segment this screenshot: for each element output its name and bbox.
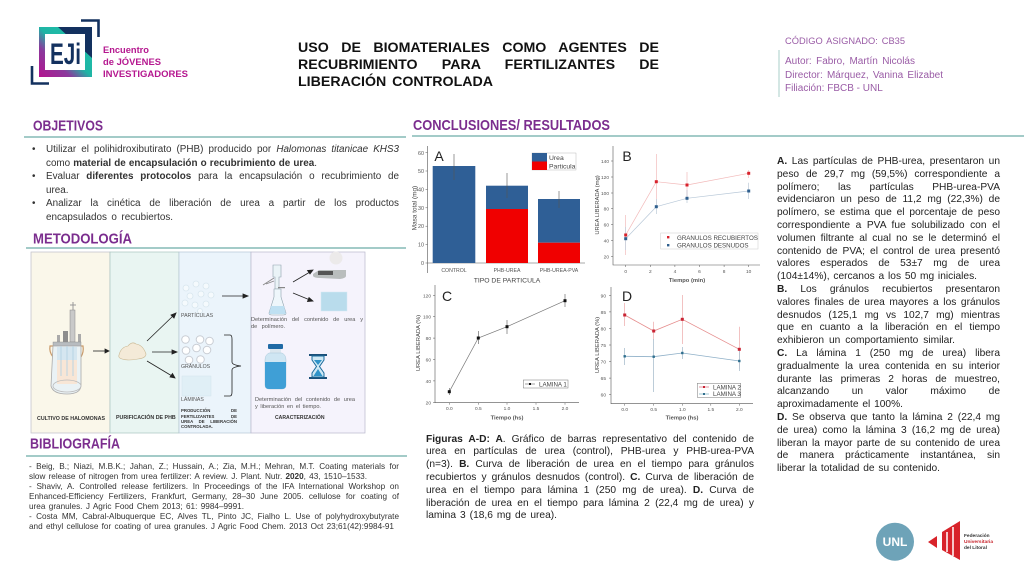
icon: PHB powder <box>119 343 146 360</box>
text block: objetivos: • <box>32 198 35 209</box>
chart B: urea liberada gránulos: 100 <box>601 191 609 197</box>
text block: diagram labels: Determinación del contenido de urea <box>255 397 355 403</box>
chart A: bar chart masa total: Masa total (mg) <box>412 186 418 230</box>
chart B: urea liberada gránulos <box>595 146 760 284</box>
chart D: urea liberada láminas 2 y 3: 80 <box>601 326 606 332</box>
chart A: bar chart masa total: 40 <box>418 188 424 194</box>
text block: objetivos: • <box>32 144 35 155</box>
text block: results discussion: desnudos (125,1 mg vs 102,7 mg) mientras <box>777 310 1000 321</box>
text block: objetivos: como material de encapsulación o recubrimiento de urea. <box>46 158 317 169</box>
chart D: urea liberada láminas 2 y 3 <box>595 287 753 422</box>
chart B: urea liberada gránulos: 0 <box>624 269 627 275</box>
icon: bioreactor <box>50 302 83 394</box>
text block: objetivos: Utilizar el polihidroxibutirato (PHB) producido por Halomonas titanicae KHS3 <box>46 144 399 155</box>
chart C: urea liberada lámina 1: 0.0 <box>446 406 453 412</box>
text block: objetivos: Analizar la cinética de liberación de urea a partir de los productos <box>46 198 399 209</box>
text block: results discussion: valores esperados de 53±7 mg de urea <box>777 258 1000 269</box>
text block: author info: Autor: Fabro, Martín Nicolás <box>785 56 915 67</box>
title: RECUBRIMIENTO PARA FERTILIZANTES DE <box>298 57 659 73</box>
text block: diagram labels: CARACTERIZACIÓN <box>275 415 325 421</box>
chart A: bar chart masa total: Particula <box>549 164 576 170</box>
chart B: urea liberada gránulos: GRANULOS DESNUDOS <box>677 242 749 250</box>
chart B: urea liberada gránulos: Tiempo (min) <box>669 278 705 284</box>
chart D: urea liberada láminas 2 y 3: 75 <box>601 343 606 349</box>
chart B: urea liberada gránulos: 140 <box>601 159 609 165</box>
chart B: urea liberada gránulos: B <box>622 148 632 164</box>
text block: figure caption: Figuras A-D: A. Gráfico de barras representativo del contenido de <box>426 434 754 444</box>
logo: Encuentro de Jóvenes Investigadores: de JÓVENES <box>103 56 161 67</box>
text block: results discussion: correspondiente a PVA fue solubilizado con el <box>777 220 1000 231</box>
text block: results discussion <box>777 156 1000 474</box>
text block: results discussion: alcanzando un valor máximo de <box>777 386 1000 397</box>
text block: results discussion: polímero; las partículas PHB-urea-PVA <box>777 182 1000 193</box>
chart D: urea liberada láminas 2 y 3: 90 <box>601 293 606 299</box>
text block: results discussion: gradualmente la urea contenida en su interior <box>777 361 1000 372</box>
text block: results discussion: valores finales de urea mayores a los gránulos <box>777 297 1000 308</box>
chart A: bar chart masa total: 30 <box>418 206 424 212</box>
icon: balance <box>313 252 346 279</box>
chart D: urea liberada láminas 2 y 3: LAMINA 2 <box>713 384 741 392</box>
text block: diagram labels: PARTÍCULAS <box>181 313 213 319</box>
chart A: bar chart masa total: TIPO DE PARTICULA <box>474 278 541 284</box>
logo: UNL <box>876 523 914 561</box>
panel: producción <box>179 252 251 433</box>
chart A: bar chart masa total: 50 <box>418 169 424 175</box>
arrows: process flow <box>93 270 313 378</box>
chart B: urea liberada gránulos: 120 <box>601 175 609 181</box>
text block: results discussion: polímero, se estima que el porcentaje de peso <box>777 207 1000 218</box>
chart D: urea liberada láminas 2 y 3: 85 <box>601 310 606 316</box>
chart B: urea liberada gránulos: 80 <box>604 206 609 212</box>
logo: Federación Universitaria del Litoral <box>928 521 993 560</box>
text block: author info: CÓDIGO ASIGNADO: CB35 <box>785 36 905 46</box>
text block: diagram labels: CULTIVO DE HALOMONAS <box>37 416 105 422</box>
chart A: bar chart masa total: A <box>434 148 444 164</box>
text block: diagram labels: CONTROLADA. <box>181 424 213 429</box>
heading: objetivos: OBJETIVOS <box>33 118 103 134</box>
text block: results discussion: exhibieron un comportamiento similar. <box>777 335 955 346</box>
chart D: urea liberada láminas 2 y 3: 1.5 <box>707 407 714 413</box>
logo: Federación Universitaria del Litoral: Federación <box>964 533 990 539</box>
chart B: urea liberada gránulos: 10 <box>746 269 752 275</box>
text block: diagram labels: LÁMINAS <box>181 397 204 403</box>
chart A: bar chart masa total: 20 <box>418 224 424 230</box>
text block: results discussion: (104±14%), cercanos a los 50 mg iniciales. <box>777 271 977 282</box>
chart D: urea liberada láminas 2 y 3: 2.0 <box>736 407 743 413</box>
chart C: urea liberada lámina 1: 80 <box>426 336 431 342</box>
panel: cultivo <box>31 252 110 433</box>
chart C: urea liberada lámina 1: 60 <box>426 358 431 364</box>
text block: diagram labels: UREA DE LIBERACIÓN <box>181 419 237 424</box>
text block: results discussion: volumen filtrante al cual no se le determinó el <box>777 233 1000 244</box>
text block: author info <box>785 36 943 94</box>
logo: Encuentro de Jóvenes Investigadores: EJi <box>50 38 81 71</box>
chart B: urea liberada gránulos: UREA LIBERADA (mg) <box>595 175 601 235</box>
text block: bibliografía: Enhanced-Efficiency Fertilizers, Frankfurt, Germany, 28–30 June 2005. cellulose for coating of <box>29 492 399 500</box>
chart C: urea liberada lámina 1: 2.0 <box>562 406 569 412</box>
chart A: bar chart masa total: CONTROL <box>441 268 467 274</box>
chart D: urea liberada láminas 2 y 3: UREA LIBERADA (%) <box>595 317 601 373</box>
chart C: urea liberada lámina 1: C <box>442 288 452 304</box>
chart B: urea liberada gránulos: 8 <box>723 269 726 275</box>
text block: results discussion: C. La lámina 1 (250 mg de urea) libera <box>777 348 1000 359</box>
text block: results discussion: contenido de PVA; el control de urea presentó <box>777 246 1000 257</box>
text block: diagram labels: GRÁNULOS <box>181 364 210 370</box>
chart D: urea liberada láminas 2 y 3: 0.0 <box>621 407 628 413</box>
text block: bibliografía: slow release of nitrogen from urea fertilizer: A review. J. Plant. Nutr. 2020, 43, 1510–1533. <box>29 472 367 480</box>
title: LIBERACIÓN CONTROLADA <box>298 74 493 90</box>
text block: bibliografía: - Costa MM, Cabral-Albuquerque EC, Alves TL, Pinto JC, Fialho L. Use of polyhydroxybutyrate <box>29 512 399 520</box>
text block: objetivos <box>32 144 399 223</box>
heading: metodología: METODOLOGÍA <box>33 230 132 248</box>
text block: diagram labels: PURIFICACIÓN DE PHB <box>116 415 176 421</box>
icon: brace <box>224 335 241 396</box>
chart D: urea liberada láminas 2 y 3: 0.5 <box>650 407 657 413</box>
chart B: urea liberada gránulos: 40 <box>604 238 609 244</box>
chart B: urea liberada gránulos: 4 <box>674 269 677 275</box>
divider: author block <box>778 50 780 97</box>
chart C: urea liberada lámina 1: LAMINA 1 <box>539 381 567 388</box>
logo: UNL: UNL <box>883 535 907 549</box>
text block: results discussion: durante las primeras 2 horas de muestreo, <box>777 374 1000 385</box>
chart A: bar chart masa total: 10 <box>418 242 424 248</box>
chart B: urea liberada gránulos: 20 <box>604 254 609 260</box>
heading: bibliografía: BIBLIOGRAFÍA <box>30 436 120 452</box>
text block: results discussion: A. Las partículas de PHB-urea, presentaron un <box>777 156 1000 167</box>
text block: figure caption: urea en el tiempo para lámina 1 (250 mg de urea). D. Curva de <box>426 485 754 496</box>
title: USO DE BIOMATERIALES COMO AGENTES DE <box>298 40 659 56</box>
icon: lámina <box>182 376 211 396</box>
chart B: urea liberada gránulos: 6 <box>698 269 701 275</box>
text block: bibliografía: and ethyl cellulose for coating of urea granules. J Agric Food Chem. 2013 Oct 23;61(42):9984-91 <box>29 522 394 530</box>
chart D: urea liberada láminas 2 y 3: 65 <box>601 376 606 382</box>
chart A: bar chart masa total <box>412 146 585 284</box>
text block: results discussion: liberar la totalidad de su contenido. <box>777 463 940 474</box>
text block: bibliografía <box>29 462 400 530</box>
text block: figure caption: recubiertos y gránulos desnudos (control). C. Curva de liberación de <box>426 472 754 483</box>
chart A: bar chart masa total: 60 <box>418 151 424 157</box>
icon: partículas <box>182 281 214 314</box>
chart A: bar chart masa total: 0 <box>421 261 424 267</box>
chart B: urea liberada gránulos: 2 <box>649 269 652 275</box>
text block: author info: Filiación: FBCB - UNL <box>785 83 883 94</box>
chart C: urea liberada lámina 1: 20 <box>426 400 431 406</box>
panel: purificación <box>110 252 179 433</box>
logo: Encuentro de Jóvenes Investigadores <box>32 20 188 84</box>
icon: bottle <box>265 344 286 389</box>
chart D: urea liberada láminas 2 y 3: 1.0 <box>679 407 686 413</box>
chart D: urea liberada láminas 2 y 3: D <box>622 288 632 304</box>
text block: diagram labels <box>37 312 363 429</box>
text block: objetivos: encapsulados o recubiertos. <box>46 212 173 223</box>
chart D: urea liberada láminas 2 y 3: LAMINA 3 <box>713 391 741 398</box>
text block: diagram labels: PRODUCCIÓN DE <box>181 408 237 413</box>
text block: diagram labels: FERTILIZANTES DE <box>181 414 237 418</box>
text block: results discussion: de manera prácticamente instantánea, sin <box>777 450 1000 461</box>
chart D: urea liberada láminas 2 y 3: 70 <box>601 360 606 366</box>
text block: objetivos: • <box>32 171 35 182</box>
text block: bibliografía: - Beig, B.; Niazi, M.B.K.; Jahan, Z.; Hussain, A.; Zia, M.H.; Mehran, M.T. Coating materials for <box>29 462 399 470</box>
chart B: urea liberada gránulos: 60 <box>604 222 609 228</box>
chart A: bar chart masa total: Urea <box>549 155 564 162</box>
text block: objetivos: urea. <box>46 185 69 196</box>
panel: caracterización <box>251 252 365 433</box>
text block: figure caption: liberación de urea en el tiempo para lámina 2 (22,4 mg de urea) y <box>426 498 754 508</box>
chart B: urea liberada gránulos: GRANULOS RECUBIERTOS <box>677 235 758 242</box>
chart D: urea liberada láminas 2 y 3: Tiempo (hs) <box>666 416 698 422</box>
chart C: urea liberada lámina 1: 100 <box>423 315 431 321</box>
logo: Encuentro de Jóvenes Investigadores: Encuentro <box>103 45 150 55</box>
text block: results discussion: de urea) como la lámina 3 (16,2 mg de urea) <box>777 425 1000 436</box>
text block: results discussion: D. Se observa que tanto la lámina 2 (22,4 mg <box>777 412 1000 423</box>
panel: metodología diagram <box>31 252 365 433</box>
logo: Federación Universitaria del Litoral: Universitaria <box>964 539 993 545</box>
text block: author info: Director: Márquez, Vanina Elizabet <box>785 70 943 80</box>
chart C: urea liberada lámina 1 <box>416 285 579 422</box>
chart C: urea liberada lámina 1: 1.0 <box>504 406 511 412</box>
logo: Encuentro de Jóvenes Investigadores: INVESTIGADORES <box>103 69 188 79</box>
chart A: bar chart masa total: PHB-UREA <box>494 268 521 274</box>
chart D: urea liberada láminas 2 y 3: 60 <box>601 393 606 399</box>
chart C: urea liberada lámina 1: 40 <box>426 379 431 385</box>
icon: gránulos <box>182 336 213 364</box>
chart C: urea liberada lámina 1: 0.5 <box>475 406 482 412</box>
text block: results discussion: evidenciaron un peso de 11,2 mg (22,3%) de <box>777 194 1000 205</box>
text block: figure caption: urea en partículas de urea (control), PHB-urea y PHB-urea-PVA <box>426 446 754 457</box>
text block: results discussion: B. Los gránulos recubiertos presentaron <box>777 284 1000 295</box>
text block: results discussion: aproximadamente el 100%. <box>777 399 903 410</box>
heading: conclusiones y resultados: CONCLUSIONES/ RESULTADOS <box>413 117 610 134</box>
chart C: urea liberada lámina 1: UREA LIBERADA (%) <box>416 315 422 371</box>
icon: filtration flask <box>263 265 286 315</box>
text block: bibliografía: - Shaviv, A. Controlled release fertilizers. In Proceedings of the IFA International Workshop on <box>29 482 399 490</box>
chart C: urea liberada lámina 1: 1.5 <box>533 406 540 412</box>
logo: Federación Universitaria del Litoral: del Litoral <box>964 545 987 551</box>
title <box>298 40 659 90</box>
text block: diagram labels: y liberación en el tiempo. <box>255 404 321 410</box>
text block: results discussion: que en cuanto a la liberación en el tiempo <box>777 322 1000 333</box>
text block: figure caption <box>426 434 754 521</box>
icon: film sample <box>321 292 347 311</box>
text block: figure caption: lamina 3 (18,6 mg de urea). <box>426 510 557 521</box>
icon: hourglass <box>309 354 327 379</box>
text block: diagram labels: Determinación del contenido de urea y <box>251 317 363 323</box>
chart A: bar chart masa total: PHB-UREA-PVA <box>540 268 579 274</box>
text block: results discussion: liberan la mayor parte de su contenido de urea <box>777 438 1000 449</box>
text block: diagram labels: de polímero. <box>251 324 285 330</box>
text block: figure caption: (n=3). B. Curva de liberación de urea en el tiempo para gránulos <box>426 459 754 470</box>
text block: bibliografía: urea granules. J Agric Food Chem 2013; 61: 9984–9991. <box>29 502 244 510</box>
chart C: urea liberada lámina 1: Tiempo (hs) <box>491 416 523 422</box>
text block: results discussion: peso de 29,7 mg (59,5%) correspondiente a <box>777 169 1000 180</box>
chart C: urea liberada lámina 1: 120 <box>423 293 431 299</box>
text block: objetivos: Evaluar diferentes protocolos para la encapsulación o recubrimiento de <box>46 171 399 182</box>
